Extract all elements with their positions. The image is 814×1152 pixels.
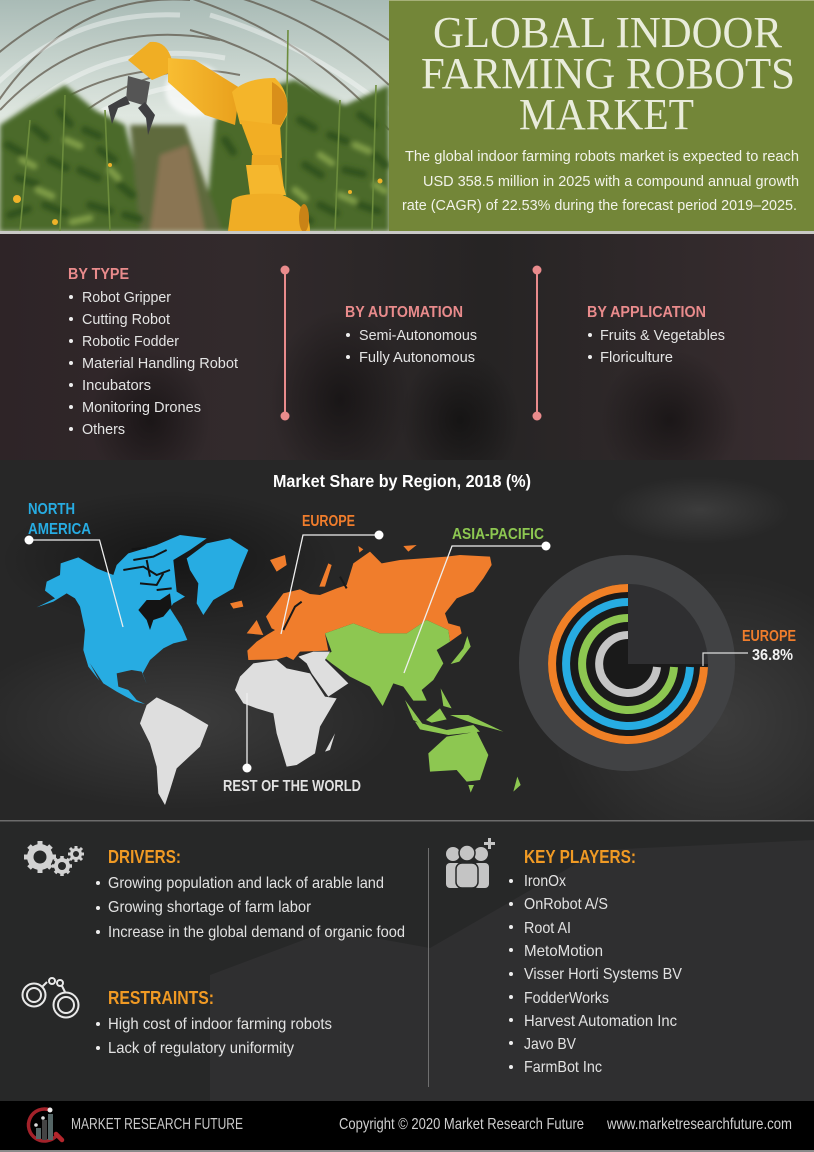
list: key players: Javo BV bbox=[524, 1036, 576, 1053]
title: FARMING ROBOTS bbox=[421, 49, 795, 98]
segment: by automation: Semi-Autonomous bbox=[359, 327, 477, 344]
title bbox=[421, 8, 795, 139]
ring: asia-pacific bbox=[582, 618, 674, 710]
label: north america: NORTH bbox=[28, 501, 75, 518]
divider with dots bbox=[532, 266, 542, 420]
foliage bbox=[0, 80, 389, 231]
panel: header photo of robot arm in greenhouse bbox=[0, 0, 389, 232]
list: key players: Harvest Automation Inc bbox=[524, 1013, 677, 1030]
leader: north america bbox=[24, 536, 123, 627]
list: restraints: High cost of indoor farming robots bbox=[108, 1016, 332, 1033]
segment: by type: Incubators bbox=[82, 377, 151, 394]
segment: by application: Floriculture bbox=[600, 349, 673, 366]
list: key players bbox=[509, 873, 682, 1076]
segment: by type: Material Handling Robot bbox=[82, 355, 239, 372]
panel: drivers, restraints, key players bbox=[0, 822, 814, 1101]
segment: by type bbox=[68, 266, 239, 438]
ring: north america bbox=[566, 602, 690, 726]
panel: market segments bbox=[0, 234, 814, 490]
heading: Market Share by Region, 2018 (%) bbox=[273, 471, 531, 491]
segment: by application: BY APPLICATION bbox=[587, 304, 706, 321]
label: europe share bbox=[742, 628, 796, 664]
map: north america bbox=[37, 535, 248, 704]
icon: gears bbox=[24, 841, 84, 876]
segment: by automation bbox=[345, 304, 477, 366]
list: key players: IronOx bbox=[524, 873, 566, 890]
list: key players: OnRobot A/S bbox=[524, 896, 608, 913]
list: drivers: Growing shortage of farm labor bbox=[108, 899, 312, 916]
label: rest of the world: REST OF THE WORLD bbox=[223, 778, 361, 795]
label: north america bbox=[28, 501, 91, 538]
icon: company logo bbox=[28, 1108, 62, 1141]
segment: by application: Fruits & Vegetables bbox=[600, 327, 725, 344]
label: europe share: 36.8% bbox=[752, 647, 793, 664]
segment: by application bbox=[587, 304, 725, 366]
leader: asia-pacific bbox=[404, 542, 550, 673]
map: asia-pacific bbox=[323, 620, 521, 793]
title: MARKET bbox=[519, 90, 694, 139]
list: drivers bbox=[96, 875, 405, 941]
leader: rest of the world bbox=[242, 693, 252, 772]
list: drivers: Growing population and lack of arable land bbox=[108, 875, 384, 892]
heading: key players: KEY PLAYERS: bbox=[524, 847, 636, 867]
robot arm bbox=[108, 42, 310, 232]
segment: by type: Others bbox=[82, 421, 125, 438]
summary text bbox=[402, 148, 799, 214]
list: key players: FodderWorks bbox=[524, 990, 609, 1007]
icon: handcuffs bbox=[22, 978, 78, 1018]
list: key players: Visser Horti Systems BV bbox=[524, 966, 682, 983]
copyright: Copyright © 2020 Market Research Future bbox=[339, 1116, 584, 1133]
company name: MARKET RESEARCH FUTURE bbox=[71, 1116, 243, 1133]
ring: europe bbox=[552, 588, 704, 740]
world map bbox=[37, 535, 521, 805]
map: europe and russia bbox=[230, 545, 492, 660]
panel: title block bbox=[389, 0, 814, 231]
summary text: The global indoor farming robots market is expected to reach bbox=[405, 148, 799, 165]
segment: by automation: Fully Autonomous bbox=[359, 349, 475, 366]
segment: by type: Monitoring Drones bbox=[82, 399, 201, 416]
ring: rest of the world bbox=[599, 635, 657, 693]
list: key players: FarmBot Inc bbox=[524, 1059, 602, 1076]
leader: europe bbox=[281, 530, 384, 634]
list: restraints bbox=[96, 1016, 332, 1057]
label: europe: EUROPE bbox=[302, 513, 355, 530]
list: restraints: Lack of regulatory uniformity bbox=[108, 1040, 294, 1057]
summary text: USD 358.5 million in 2025 with a compound annual growth bbox=[423, 173, 799, 190]
footer bbox=[0, 1101, 814, 1152]
segment: by type: Cutting Robot bbox=[82, 311, 171, 328]
segment: by type: Robotic Fodder bbox=[82, 333, 179, 350]
panel: market share by region bbox=[0, 460, 814, 870]
list: key players: MetoMotion bbox=[524, 943, 603, 960]
map: rest of the world bbox=[140, 652, 348, 805]
segment: by type: Robot Gripper bbox=[82, 289, 171, 306]
label: north america: AMERICA bbox=[28, 521, 91, 538]
summary text: rate (CAGR) of 22.53% during the forecast period 2019–2025. bbox=[402, 197, 797, 214]
heading: drivers: DRIVERS: bbox=[108, 847, 181, 867]
icon: people with plus bbox=[446, 838, 495, 888]
segment: by type: BY TYPE bbox=[68, 266, 129, 283]
label: europe share: EUROPE bbox=[742, 628, 796, 645]
title: GLOBAL INDOOR bbox=[433, 8, 783, 57]
heading: restraints: RESTRAINTS: bbox=[108, 988, 214, 1008]
radial chart bbox=[519, 555, 796, 771]
label: asia-pacific: ASIA-PACIFIC bbox=[452, 526, 544, 543]
list: key players: Root AI bbox=[524, 920, 571, 937]
divider with dots bbox=[280, 266, 290, 420]
segment: by automation: BY AUTOMATION bbox=[345, 304, 463, 321]
list: drivers: Increase in the global demand of organic food bbox=[108, 924, 405, 941]
